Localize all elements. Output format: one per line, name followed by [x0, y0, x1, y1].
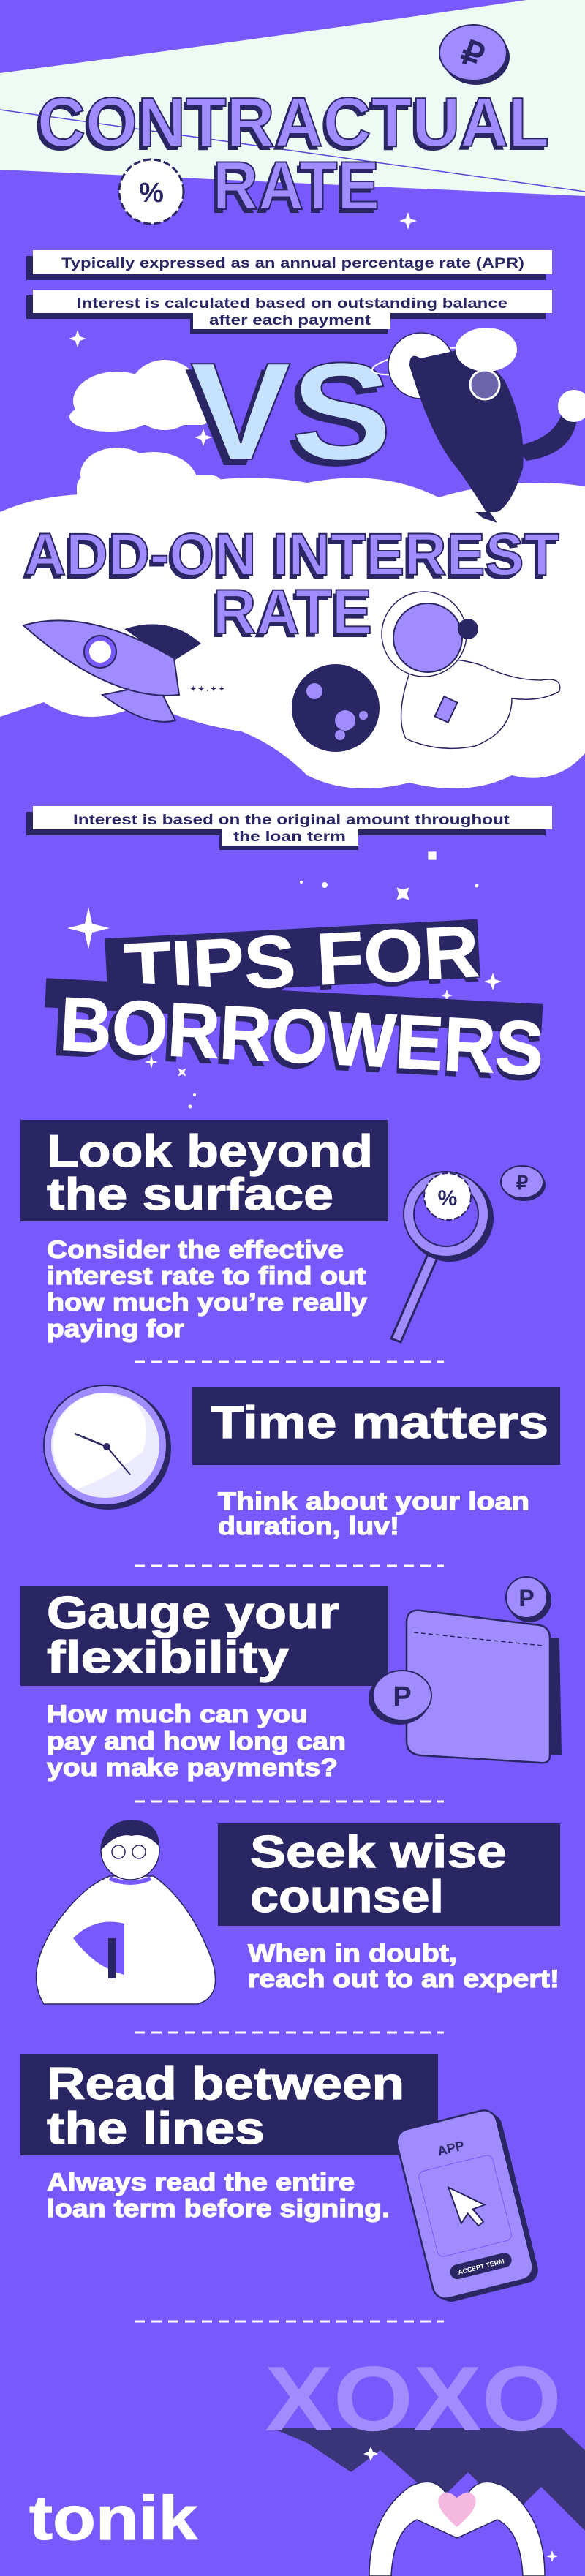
divider [135, 2032, 444, 2033]
text box: original amount [26, 806, 552, 850]
icon: wallet with coins: P [393, 1681, 412, 1712]
text box: outstanding balance [26, 290, 552, 334]
illustration: heart hands [369, 2482, 545, 2576]
illustration: rocket [23, 620, 224, 722]
title: add-on interest rate: ADD-ON INTEREST [24, 521, 559, 588]
text box: outstanding balance: after each payment [209, 313, 371, 328]
title: contractual rate [34, 83, 549, 227]
title: contractual rate: CONTRACTUAL [37, 83, 549, 162]
text box: original amount: the loan term [233, 829, 346, 845]
title: tips for borrowers: TIPS FOR [116, 916, 481, 1016]
title: add-on interest rate: ADD-ON INTEREST [21, 525, 556, 592]
illustration: advisor person [37, 1820, 215, 2004]
tip 1: look beyond the surface: paying for [47, 1315, 184, 1343]
icon: phone app: APP [436, 2138, 466, 2159]
text box: outstanding balance: Interest is calculated based on outstanding balance [77, 296, 507, 312]
tip 3: gauge your flexibility [20, 1586, 388, 1782]
tip 5: read between the lines: loan term before signing. [47, 2195, 390, 2223]
tip 2: time matters [192, 1387, 560, 1540]
icon: phone app [394, 2106, 541, 2305]
illustration: rocket: ✦ ✦ . ✦ ✦ [190, 685, 224, 693]
background band [0, 0, 585, 196]
sparkles [69, 330, 212, 446]
tip 5: read between the lines: the lines [47, 2104, 265, 2154]
text box: APR: Typically expressed as an annual percentage rate (APR) [61, 256, 524, 271]
tip 4: seek wise counsel: When in doubt, [248, 1940, 457, 1967]
sparkles around tips title [67, 848, 502, 1109]
VS: VS [190, 334, 392, 489]
divider [135, 1360, 444, 1363]
icon: coin P top: ₽ [456, 32, 489, 75]
tip 3: gauge your flexibility: flexibility [47, 1632, 290, 1683]
logo: tonik: tonik [29, 2484, 197, 2553]
icon: coin P top [439, 25, 510, 85]
icon: sparkle small [363, 2447, 558, 2562]
text box: APR [26, 250, 552, 280]
icon: percent badge: % [139, 178, 164, 208]
divider [135, 1801, 444, 1802]
icon: sparkle [399, 212, 417, 230]
tip 2: time matters: Time matters [211, 1398, 548, 1448]
tip 4: seek wise counsel: counsel [250, 1872, 444, 1922]
title: contractual rate: RATE [213, 147, 380, 224]
tip 1: look beyond the surface: Look beyond [47, 1126, 373, 1177]
illustration: moon [292, 664, 380, 752]
icon: magnifier: ₽ [516, 1172, 529, 1194]
tip 3: gauge your flexibility: you make payments? [47, 1754, 338, 1782]
tip 1: look beyond the surface: interest rate to find out [47, 1262, 366, 1290]
icon: phone app: ACCEPT TERM [457, 2257, 505, 2276]
tip 1: look beyond the surface: Consider the effective [47, 1236, 344, 1264]
tip 3: gauge your flexibility: How much can you [47, 1701, 308, 1728]
illustration: cat with planet [371, 328, 585, 523]
divider [135, 2320, 444, 2323]
divider [135, 1565, 444, 1567]
title: tips for borrowers: TIPS FOR [123, 911, 481, 1011]
XOXO sign-off: XOXO [265, 2347, 562, 2450]
title: add-on interest rate [21, 521, 559, 651]
tip 1: look beyond the surface [20, 1120, 388, 1343]
VS: VS [184, 340, 386, 495]
icon: wallet with coins: P [518, 1585, 535, 1611]
title: contractual rate: CONTRACTUAL [34, 87, 546, 165]
tip 5: read between the lines: Always read the entire [47, 2169, 355, 2196]
title: add-on interest rate: RATE [210, 581, 369, 651]
tip 3: gauge your flexibility: pay and how long can [47, 1728, 346, 1755]
icon: magnifier: % [438, 1186, 457, 1210]
title: tips for borrowers [42, 911, 546, 1098]
tip 5: read between the lines: Read between [47, 2059, 404, 2109]
title: add-on interest rate: RATE [213, 577, 372, 647]
tip 2: time matters: Think about your loan [218, 1488, 529, 1515]
clouds [0, 360, 585, 788]
text box: original amount: Interest is based on the original amount throughout [73, 813, 510, 828]
title: tips for borrowers: BORROWERS [58, 982, 546, 1092]
illustration: astronaut [382, 592, 560, 748]
icon: clock [44, 1385, 171, 1510]
tip 1: look beyond the surface: how much you’re really [47, 1289, 367, 1317]
icon: magnifier [391, 1166, 546, 1342]
XOXO sign-off [265, 2347, 585, 2531]
title: contractual rate: RATE [210, 151, 377, 227]
tip 3: gauge your flexibility: Gauge your [47, 1588, 339, 1638]
icon: wallet with coins [369, 1577, 562, 1763]
tip 4: seek wise counsel: Seek wise [250, 1827, 507, 1878]
tip 4: seek wise counsel: reach out to an expert! [248, 1965, 559, 1993]
tip 2: time matters: duration, luv! [218, 1513, 399, 1540]
tip 4: seek wise counsel [218, 1823, 560, 1993]
tip 5: read between the lines [20, 2054, 438, 2223]
icon: percent badge [119, 159, 184, 224]
tip 1: look beyond the surface: the surface [47, 1170, 333, 1220]
title: tips for borrowers: BORROWERS [50, 987, 546, 1098]
